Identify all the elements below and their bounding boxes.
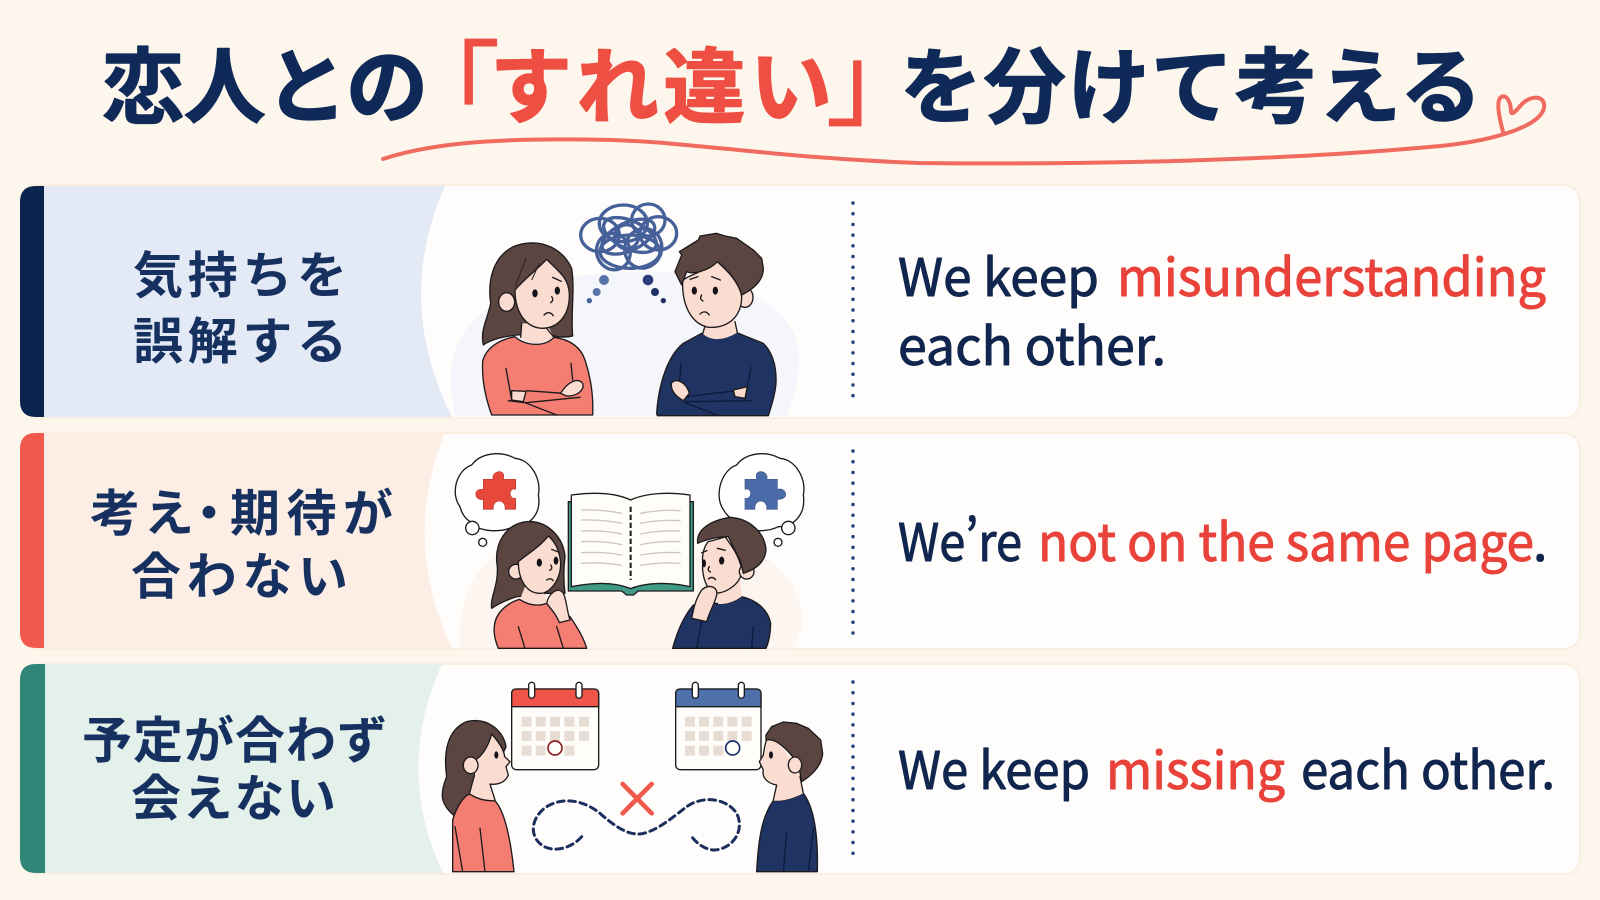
accent bar [20, 186, 44, 417]
panel: row 3 missing each other [20, 664, 1580, 874]
woman [482, 243, 593, 415]
dashed path [533, 800, 739, 850]
English sentence: each other. [898, 305, 1166, 380]
label text [82, 713, 387, 827]
English sentence [898, 729, 1555, 804]
English sentence [898, 236, 1546, 380]
icon: blue calendar [676, 682, 761, 770]
English sentence: missing [1106, 729, 1285, 804]
man [673, 517, 771, 648]
illustration: book and puzzle thoughts [455, 454, 804, 648]
woman [442, 721, 514, 872]
man [757, 722, 823, 872]
woman [491, 522, 587, 648]
English sentence: We keep [898, 729, 1090, 804]
icon: open book [568, 493, 693, 595]
title: すれ違い [490, 43, 832, 134]
English sentence: . [1533, 501, 1547, 576]
label text: 考え [90, 486, 194, 542]
title: 」 [826, 27, 926, 139]
dotted divider [851, 451, 855, 634]
illustration: couple with tangled thoughts [451, 204, 799, 416]
panel: row 1 misunderstanding [20, 185, 1580, 418]
dotted divider [851, 203, 855, 403]
title: を分けて考える [900, 43, 1482, 134]
accent bar [20, 664, 45, 873]
icon: tangled thought [581, 204, 677, 275]
dotted divider [851, 682, 855, 858]
English sentence: each other. [1301, 729, 1555, 804]
icon: cross mark [623, 784, 652, 813]
English sentence: not on the same page [1038, 501, 1534, 576]
icon: red calendar [512, 682, 599, 770]
label text [133, 248, 347, 370]
label text [90, 486, 393, 605]
title [102, 27, 1482, 146]
English sentence: We keep [898, 236, 1099, 311]
title: 「 [400, 34, 500, 146]
illustration: calendars and missed path [442, 682, 823, 872]
card background [21, 185, 1580, 418]
card background [21, 664, 1580, 874]
left label panel background [36, 186, 452, 417]
label text: 期待が [230, 486, 393, 542]
panel: row 2 not on the same page [20, 433, 1580, 649]
label text: 予定が合わず [82, 713, 387, 769]
icon: thought bubble red puzzle [455, 454, 539, 546]
accent bar [20, 433, 44, 648]
label text: 合わない [131, 549, 348, 605]
label text: ・ [184, 486, 234, 542]
label text: 会えない [131, 771, 336, 827]
man [657, 233, 776, 416]
English sentence: misunderstanding [1117, 236, 1546, 311]
icon: thought bubble blue puzzle [719, 454, 804, 546]
English sentence: We’re [898, 501, 1022, 576]
left label panel background [36, 664, 443, 873]
title: 恋人との [102, 43, 428, 134]
left label panel background [36, 433, 452, 648]
card background [21, 433, 1580, 649]
decorative underline with heart [383, 96, 1544, 163]
label text: 誤解する [133, 314, 347, 370]
label text: 気持ちを [133, 248, 347, 304]
